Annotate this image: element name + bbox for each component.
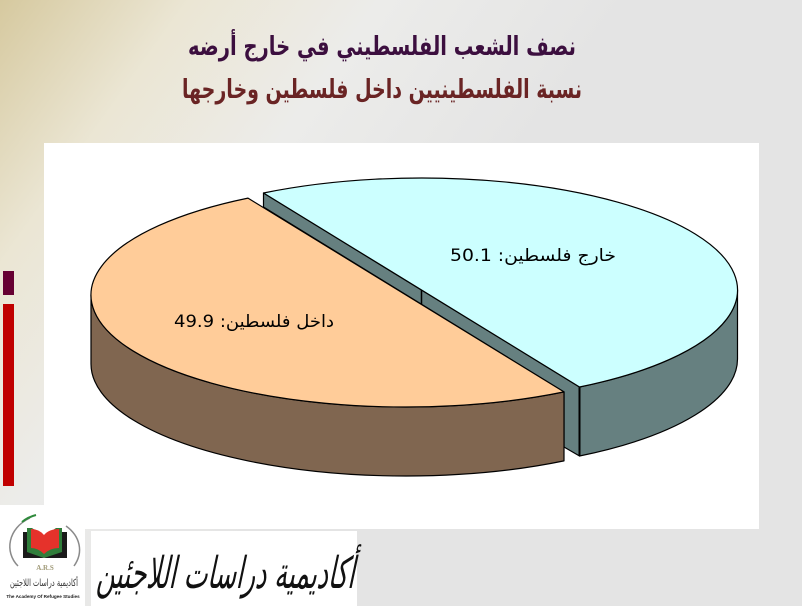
label: outside Palestine: خارج فلسطين: 50.1 (450, 246, 616, 266)
logo: academy emblem (0, 505, 85, 606)
icon: laurel arcs (10, 518, 80, 566)
icon: book (23, 528, 67, 558)
subtitle: نسبة الفلسطينيين داخل فلسطين وخارجها (182, 75, 582, 105)
label: inside Palestine: داخل فلسطين: 49.9 (174, 312, 334, 332)
slice: inside Palestine 49.9 (91, 198, 564, 476)
decorative bar: red (3, 304, 14, 486)
title: main heading: نصف الشعب الفلسطيني في خارج أرضه (188, 29, 576, 62)
logo: calligraphy banner: أكاديمية دراسات اللاجئين (94, 543, 363, 599)
text: A.R.S: A.R.S (36, 564, 54, 572)
icon: flag swoosh (22, 515, 36, 522)
text: English name: The Academy Of Refugee Studies (6, 594, 80, 599)
text: small Arabic name: أكاديمية دراسات اللاجئين (10, 576, 78, 589)
panel: chart background (44, 143, 759, 529)
pie chart (91, 178, 738, 476)
decorative bar: maroon (3, 271, 14, 295)
logo: calligraphy banner (91, 531, 363, 606)
slice: outside Palestine 50.1 (264, 178, 738, 456)
